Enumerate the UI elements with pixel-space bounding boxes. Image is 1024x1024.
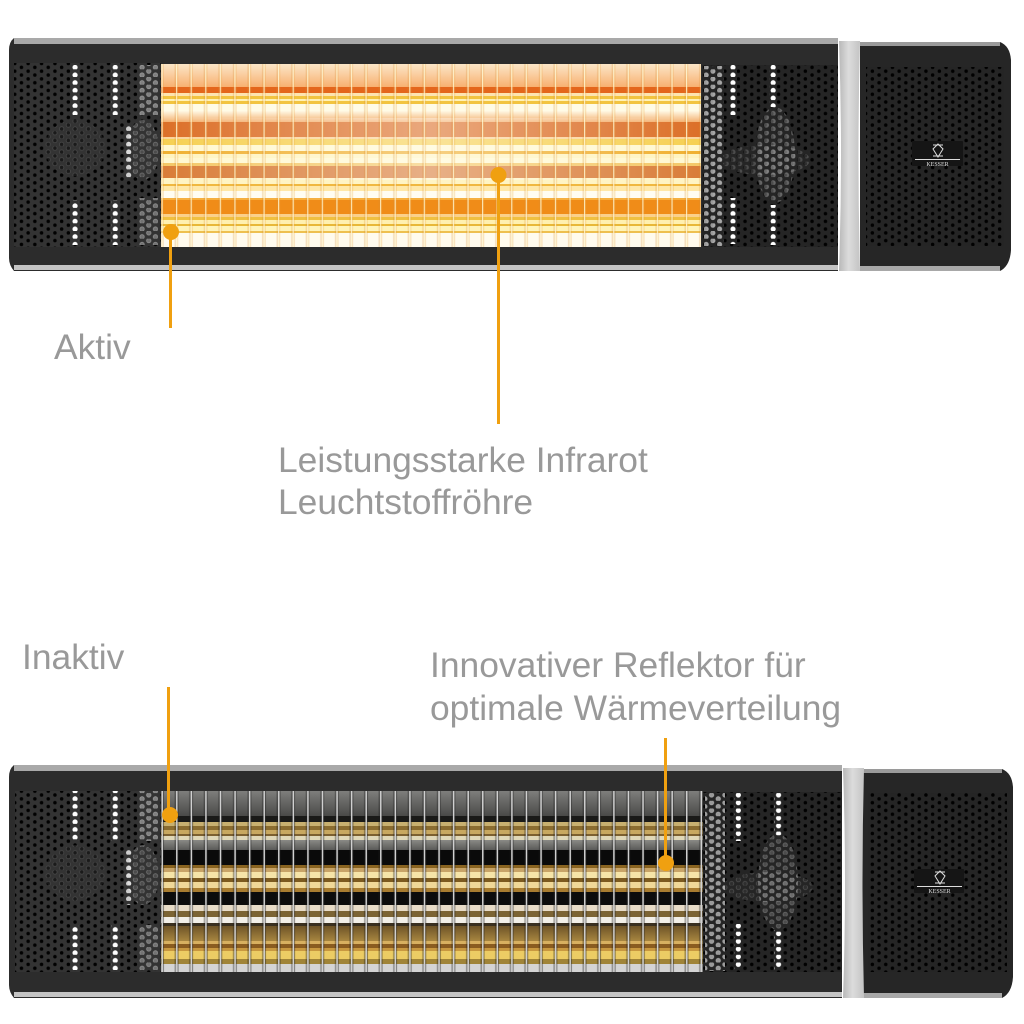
label: tube description: Leistungsstarke Infrarot (278, 440, 648, 480)
logo plate (914, 869, 964, 895)
label: reflector description: optimale Wärmeverteilung (430, 688, 841, 728)
heater body (9, 765, 1013, 998)
side mesh (866, 67, 1004, 246)
logo plate: KESSER (926, 162, 949, 168)
callout line: tube (490, 167, 506, 424)
left mesh (14, 63, 161, 247)
label: Aktiv: Aktiv (54, 327, 131, 367)
right mesh (703, 792, 842, 972)
right mesh (702, 65, 838, 247)
logo plate (912, 141, 963, 168)
side mesh (868, 793, 1007, 972)
label: tube description: Leuchtstoffröhre (278, 482, 533, 522)
label: reflector description: Innovativer Reflektor für (430, 645, 806, 685)
heater body (9, 38, 1011, 271)
callout line: Aktiv (163, 224, 179, 328)
callout line: Inaktiv (162, 687, 178, 823)
reflector (161, 791, 703, 972)
heater: active (9, 38, 1011, 424)
glowing infrared tube (161, 64, 701, 247)
left mesh (15, 791, 161, 972)
label: Inaktiv: Inaktiv (22, 637, 125, 677)
logo plate: KESSER (928, 889, 951, 895)
heater: inactive (9, 687, 1013, 998)
callout line: reflector (658, 738, 674, 871)
